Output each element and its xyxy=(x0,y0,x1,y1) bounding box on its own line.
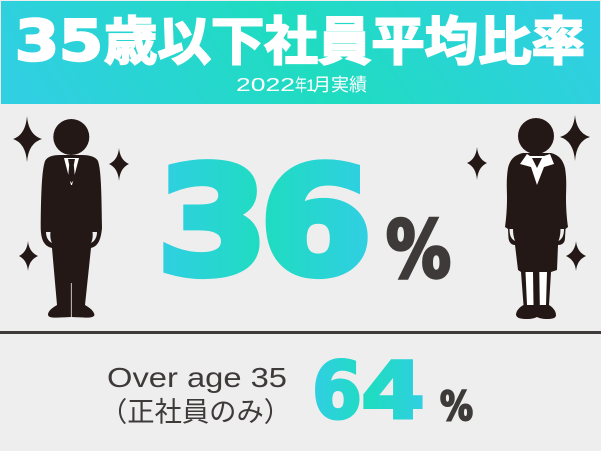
secondary figure: 64 xyxy=(312,347,425,437)
subtitle: 月実績 xyxy=(313,75,367,95)
secondary figure: 64: 6 xyxy=(312,347,362,437)
divider xyxy=(0,331,601,334)
main figure: 36: 6 xyxy=(260,136,372,308)
main percent sign: % xyxy=(386,206,451,296)
figure: woman xyxy=(505,118,568,319)
sparkles: woman xyxy=(467,115,590,271)
tie xyxy=(68,159,75,183)
main figure: 36 xyxy=(157,136,372,308)
subtitle xyxy=(236,75,367,95)
shirt xyxy=(64,158,79,185)
title: 35 xyxy=(15,9,103,74)
label: over age 35: （正社員のみ） xyxy=(100,396,291,427)
subtitle: 1 xyxy=(306,76,315,95)
secondary percent sign: % xyxy=(440,384,473,430)
secondary figure: 64: 4 xyxy=(361,347,425,437)
subtitle: 2022 xyxy=(236,75,295,95)
blouse collar xyxy=(520,154,554,185)
header band xyxy=(1,1,600,104)
subtitle: 年 xyxy=(295,76,307,95)
main figure: 36: 3 xyxy=(157,136,268,308)
label: over age 35 xyxy=(100,362,291,427)
sparkles: man xyxy=(13,116,129,271)
label: over age 35: Over age 35 xyxy=(107,362,287,393)
figure: man xyxy=(41,119,102,318)
title: 歳以下社員平均比率 xyxy=(104,14,585,72)
